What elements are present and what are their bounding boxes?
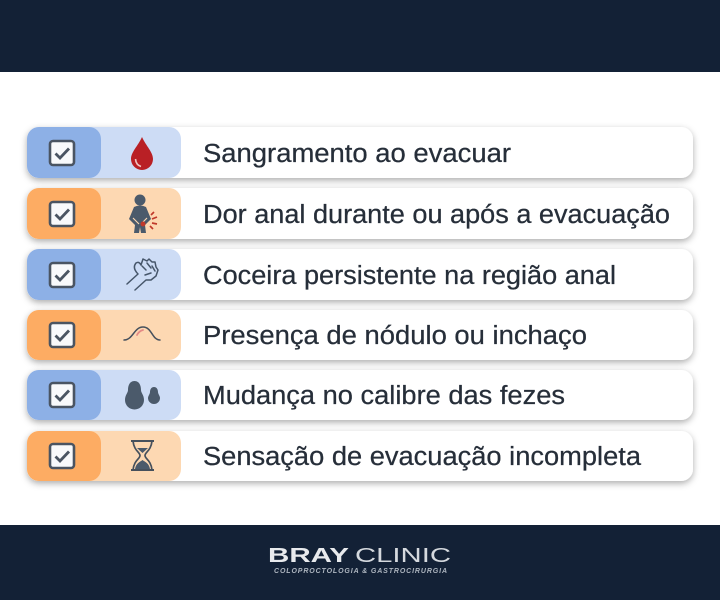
row 1: Sangramento ao evacuar: Sangramento ao evacuar bbox=[203, 140, 512, 168]
row 2: Dor anal bbox=[27, 188, 693, 239]
icon: person in pain bbox=[129, 194, 157, 233]
row 3: Coceira bbox=[27, 249, 693, 300]
row 3: Coceira: Coceira persistente na região anal bbox=[203, 262, 616, 290]
logo: BRAY bbox=[268, 545, 350, 567]
row 4: Presença de nódulo: Presença de nódulo ou inchaço bbox=[203, 322, 587, 350]
icon: stool shapes bbox=[125, 381, 160, 410]
row 1: Sangramento ao evacuar bbox=[27, 127, 693, 178]
logo: COLOPROCTOLOGIA & GASTROCIRURGIA bbox=[274, 568, 447, 575]
row 6: Sensação bbox=[27, 431, 693, 481]
top band bbox=[0, 0, 720, 72]
row 5: Mudança no calibre: Mudança no calibre das fezes bbox=[203, 382, 565, 410]
row 4: Presença de nódulo bbox=[27, 310, 693, 360]
icon: hourglass bbox=[131, 441, 154, 470]
icon: hand bbox=[127, 259, 158, 290]
row 6: Sensação: Sensação de evacuação incompleta bbox=[203, 443, 642, 471]
logo: CLINIC bbox=[355, 545, 451, 567]
row 2: Dor anal: Dor anal durante ou após a evacuação bbox=[203, 201, 670, 229]
bottom band bbox=[0, 525, 720, 600]
logo bbox=[268, 545, 451, 575]
icon: blood drop bbox=[131, 137, 153, 170]
icon: swelling curve bbox=[124, 327, 160, 340]
row 5: Mudança no calibre bbox=[27, 370, 693, 420]
